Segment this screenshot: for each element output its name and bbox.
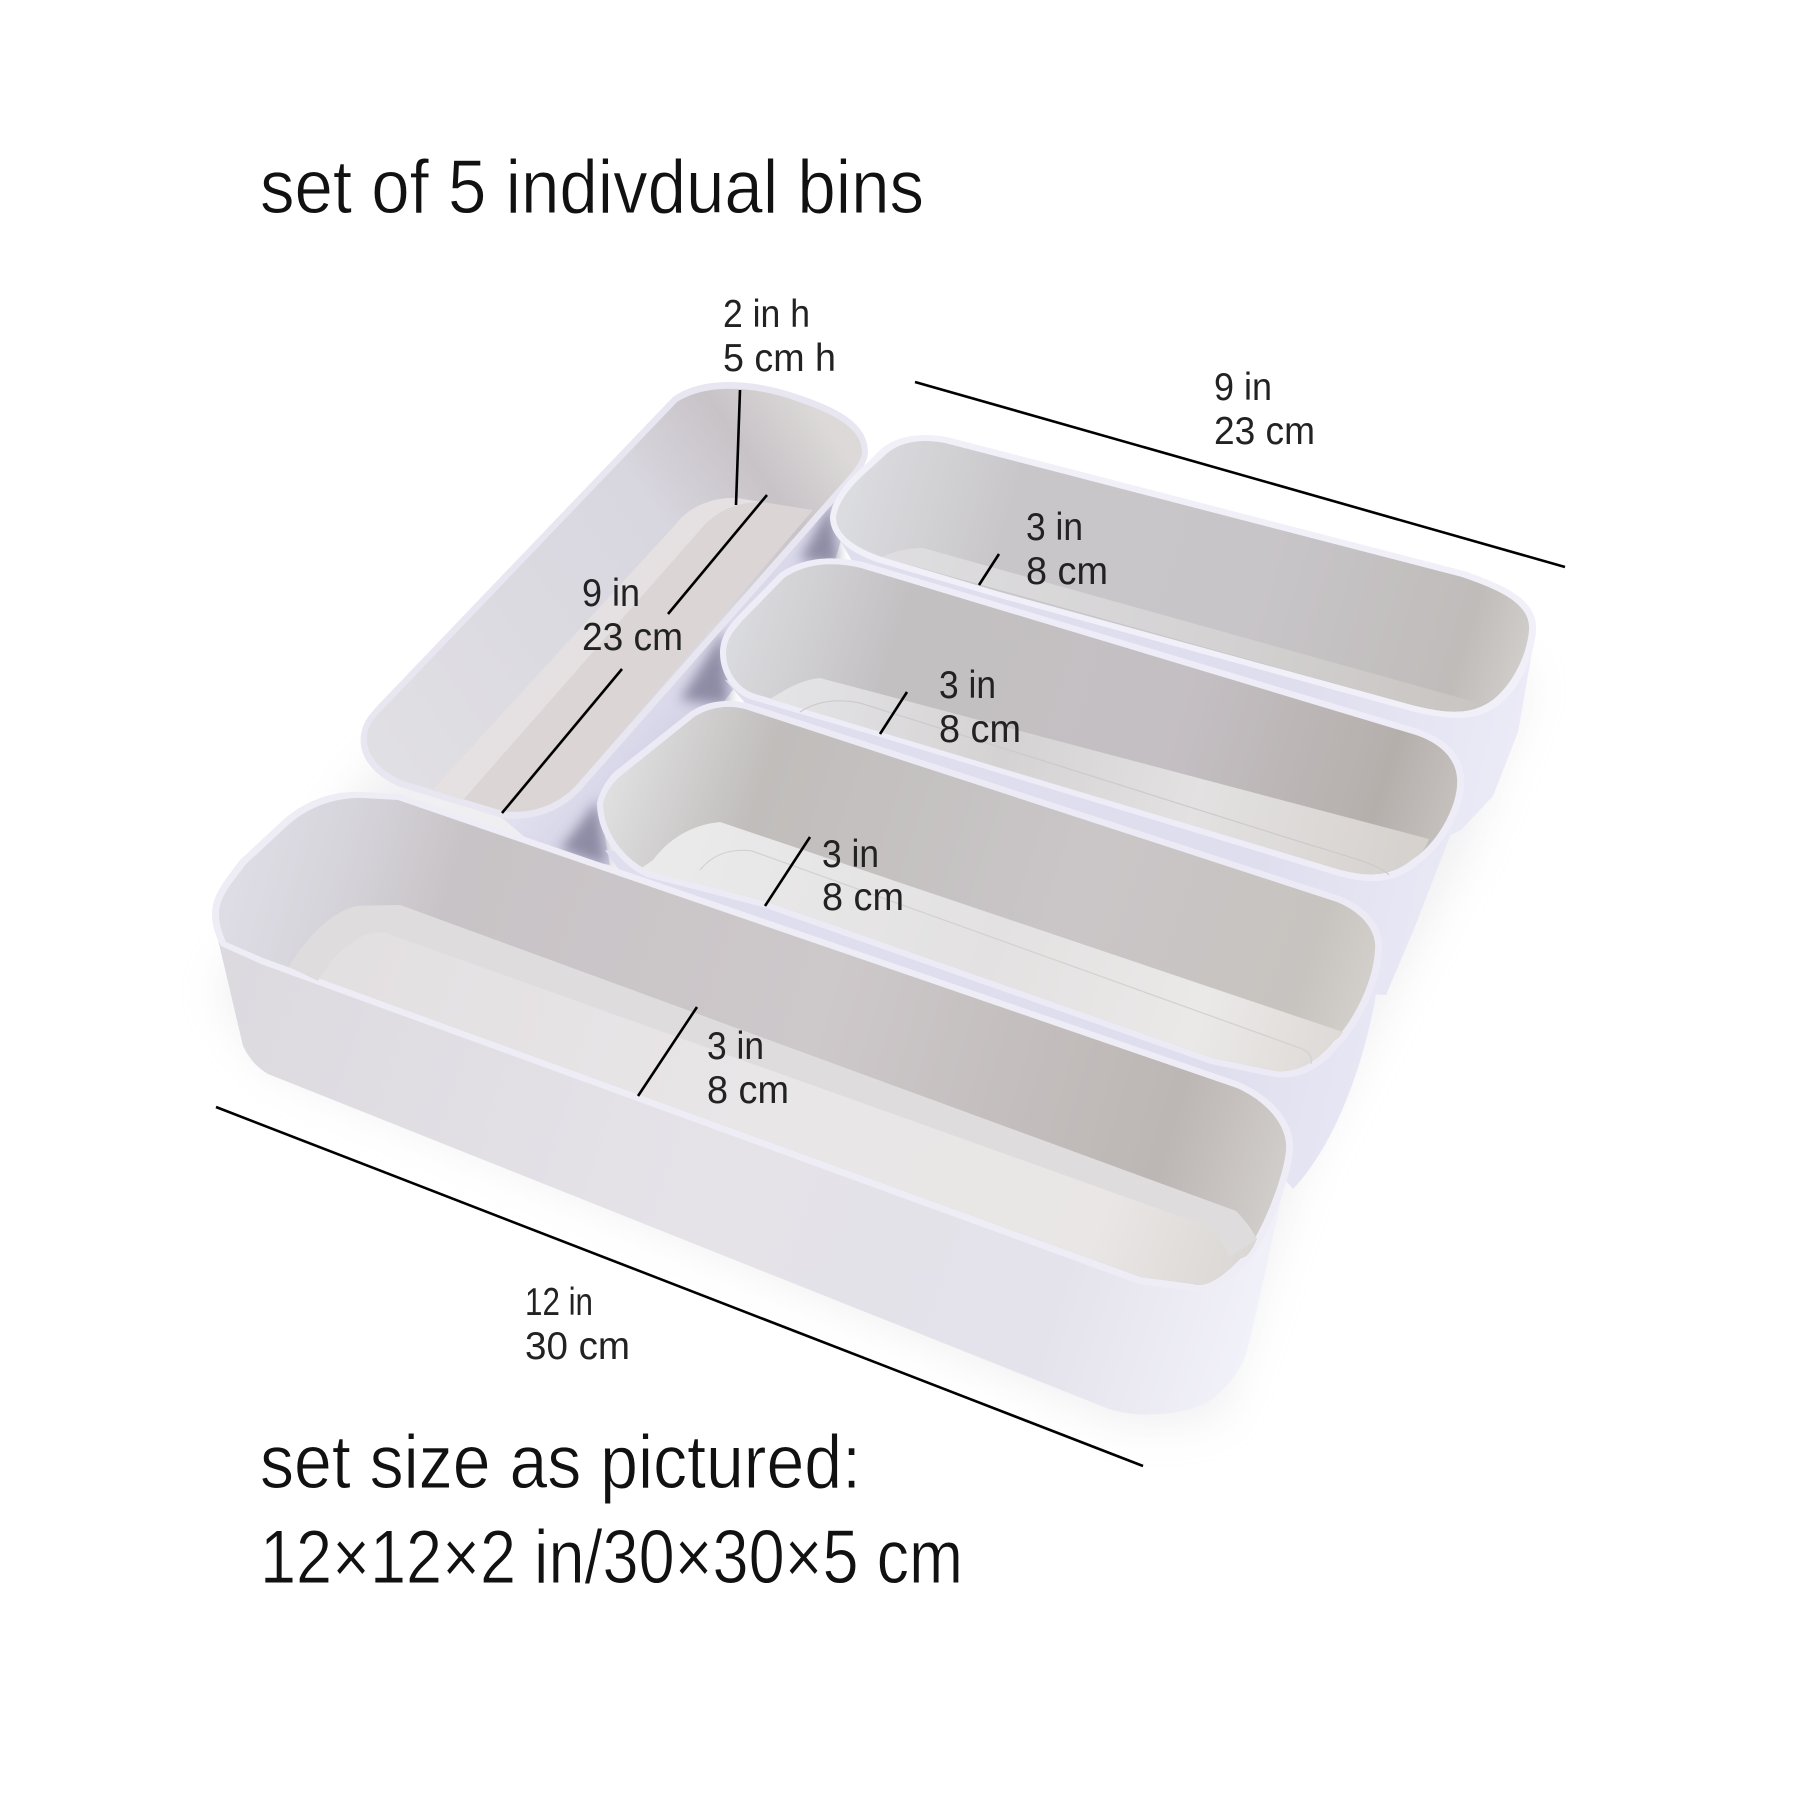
bin body: [840, 540, 1536, 840]
bin inner wall: [726, 564, 1457, 874]
label: middle bin width: 3 in: [939, 664, 996, 707]
measure line: back length: [915, 382, 1565, 567]
label: long bin length: 12 in: [525, 1281, 593, 1324]
measure line: bin height: [736, 390, 740, 505]
bin floor band: [432, 498, 760, 800]
label: front middle bin width: 8 cm: [822, 876, 904, 919]
bin body: [605, 850, 1382, 1189]
bin rim: [597, 701, 1382, 1077]
bin rim: [212, 792, 1293, 1292]
bin side wall: [502, 452, 868, 865]
bin floor: [770, 678, 1429, 874]
measure line: left bin length lower: [502, 669, 622, 813]
title: set of 5 indivdual bins: [260, 145, 924, 230]
bin inner wall: [836, 441, 1529, 712]
bin: back right bin: [830, 435, 1536, 840]
label: back length: 23 cm: [1214, 410, 1315, 453]
measure line: left bin length upper: [668, 495, 767, 614]
label: long bin length: 30 cm: [525, 1325, 630, 1368]
bin floor: [432, 498, 813, 812]
bin floor: [263, 905, 1257, 1285]
label: left bin length: [582, 572, 683, 659]
caption: set size: set size as pictured:: [260, 1420, 861, 1505]
label: back bin width: [1026, 506, 1108, 593]
bin inner wall: [603, 707, 1375, 1071]
label: back bin width: 8 cm: [1026, 550, 1108, 593]
measure line: back bin width: [979, 554, 999, 585]
label: back bin width: 3 in: [1026, 506, 1083, 549]
label: long bin length: [525, 1281, 630, 1368]
label: height: 5 cm h: [723, 337, 836, 380]
measure line: long bin width: [638, 1007, 697, 1096]
label: left bin length: 9 in: [582, 572, 640, 615]
bin rim: [720, 558, 1464, 881]
bin floor: [640, 822, 1343, 1071]
bin rim: [830, 435, 1536, 718]
bin: tall left bin: [361, 382, 868, 865]
bin floor band: [289, 905, 1257, 1257]
label: back length: 9 in: [1214, 366, 1272, 409]
bin side shadows: [560, 500, 838, 865]
label: height: 2 in h: [723, 293, 810, 336]
caption: set size: 12×12×2 in/30×30×5 cm: [260, 1515, 963, 1600]
label: middle bin width: [939, 664, 1021, 751]
bin body: [212, 914, 1293, 1415]
label: long bin width: [707, 1025, 789, 1112]
label: long bin width: 3 in: [707, 1025, 764, 1068]
bin rim: [361, 382, 868, 819]
label: long bin width: 8 cm: [707, 1069, 789, 1112]
measure line: front middle bin width: [765, 837, 810, 906]
bin body: [725, 680, 1464, 995]
bin: middle bin: [720, 558, 1464, 995]
bin: front middle bin: [597, 701, 1382, 1189]
bin inner wall: [219, 798, 1286, 1285]
measure line: long bin length: [216, 1107, 1143, 1466]
bin floor: [882, 548, 1495, 712]
label: left bin length: 23 cm: [582, 616, 683, 659]
bin: long front bin: [212, 792, 1293, 1415]
label: height: [723, 293, 836, 380]
soft ground shadow: [218, 640, 1530, 1425]
label: front middle bin width: [822, 833, 904, 919]
label: middle bin width: 8 cm: [939, 708, 1021, 751]
label: back length: [1214, 366, 1315, 453]
measure line: middle bin width: [880, 692, 907, 734]
bin floor crease: [800, 701, 1389, 875]
caption: set size: [260, 1420, 963, 1600]
bin floor crease: [700, 850, 1311, 1064]
label: front middle bin width: 3 in: [822, 833, 879, 876]
bin inner wall: [367, 389, 862, 812]
